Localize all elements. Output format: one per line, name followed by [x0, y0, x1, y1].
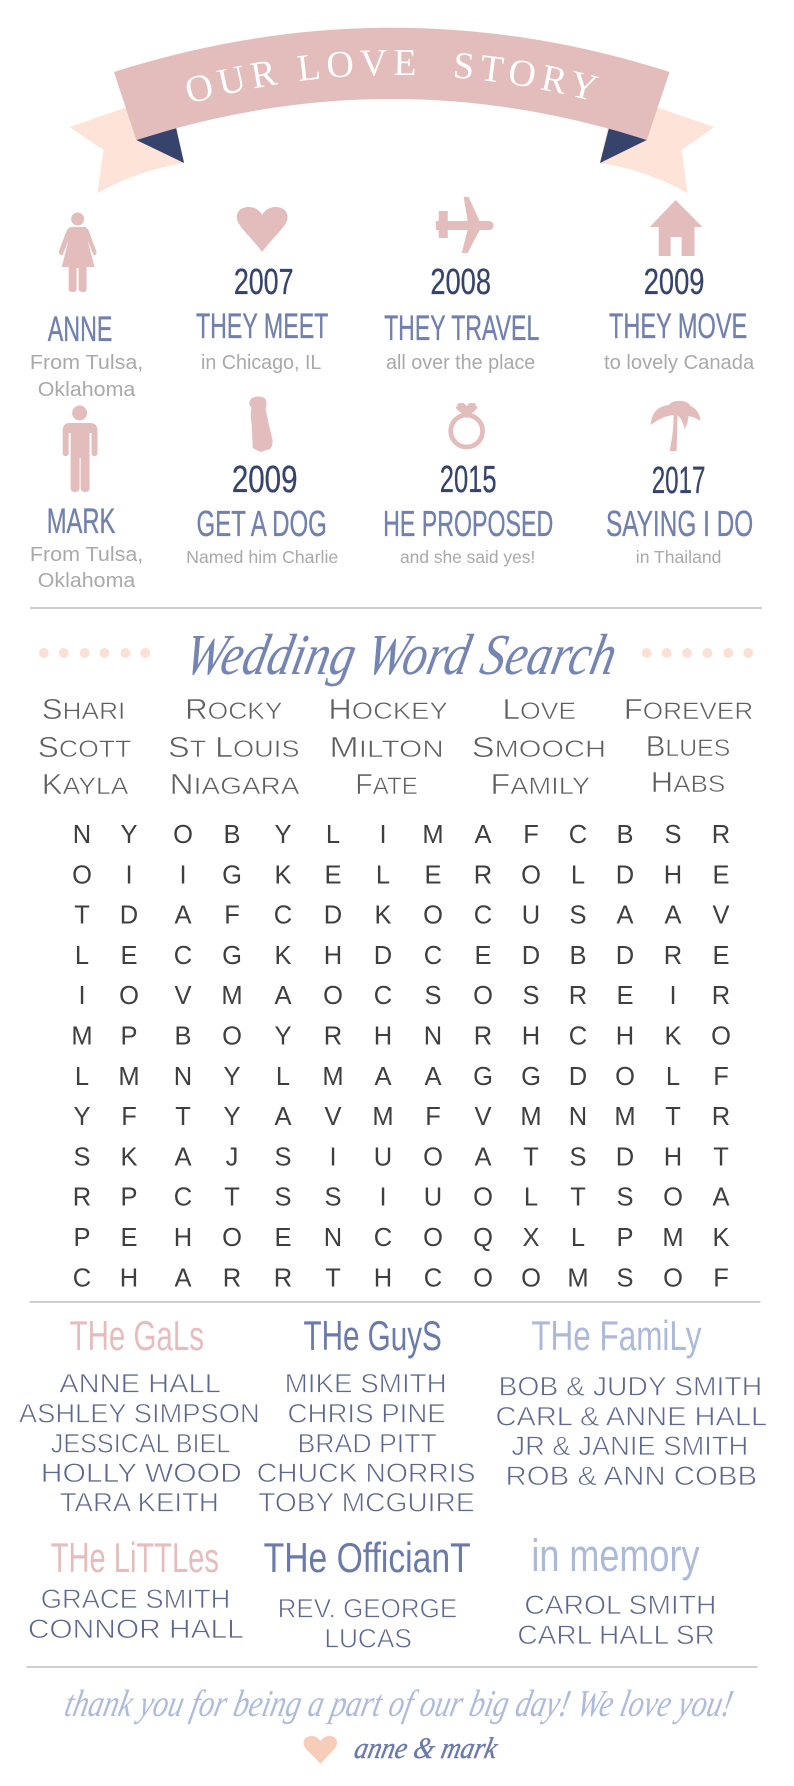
2015 he proposed: 2015 — [440, 459, 497, 501]
letter grid: RPCTSSIUOLTSOA — [73, 1184, 730, 1212]
heading: wedding word search: Wedding Word Search — [179, 623, 623, 687]
letter grid — [71, 821, 731, 1292]
icon: ring — [451, 403, 483, 447]
the officiant: LUCAS — [324, 1624, 412, 1654]
Anne block: Oklahoma — [38, 379, 136, 401]
footer — [61, 1683, 737, 1765]
2009 they move — [604, 200, 755, 374]
2015 he proposed: and she said yes! — [400, 547, 535, 567]
2007 they meet — [196, 207, 328, 374]
dots right — [642, 648, 753, 658]
Mark block: MARK — [47, 502, 115, 541]
banner tail left — [70, 108, 184, 193]
panel: word search — [38, 623, 753, 1292]
the littles: CONNOR HALL — [28, 1614, 244, 1644]
2009 they move: to lovely Canada — [604, 352, 755, 374]
letter grid: LMNYLMAAGGDOLF — [75, 1063, 729, 1091]
the family: JR & JANIE SMITH — [511, 1431, 748, 1461]
word list: MILTON — [329, 732, 444, 764]
the guys — [257, 1312, 476, 1518]
the gals: ANNE HALL — [59, 1369, 221, 1399]
the family: CARL & ANNE HALL — [496, 1401, 767, 1431]
2009 get a dog — [186, 396, 338, 567]
word list: HABS — [651, 767, 725, 799]
2007 they meet: in Chicago, IL — [201, 352, 321, 374]
2007 they meet: THEY MEET — [196, 307, 328, 346]
the littles — [28, 1534, 244, 1644]
panel: wedding party — [19, 1312, 767, 1654]
the littles: GRACE SMITH — [41, 1584, 230, 1614]
in memory: in memory — [531, 1530, 700, 1581]
2017 saying i do: 2017 — [652, 460, 705, 502]
2015 he proposed: HE PROPOSED — [383, 503, 553, 544]
letter grid: NYOBYLIMAFCBSR — [73, 821, 730, 849]
Anne block: ANNE — [48, 310, 112, 349]
2008 they travel — [384, 197, 539, 374]
in memory: CARL HALL SR — [517, 1620, 715, 1650]
timeline panel — [30, 197, 755, 592]
icon: peach heart — [304, 1736, 337, 1764]
Anne block — [30, 212, 143, 401]
word list: HOCKEY — [328, 694, 448, 726]
word list: NIAGARA — [170, 769, 300, 801]
2017 saying i do — [606, 401, 753, 567]
letter grid: LECGKHDCEDBDRE — [75, 942, 730, 970]
word list: FATE — [355, 769, 418, 801]
2017 saying i do: in Thailand — [636, 547, 721, 567]
2009 they move: 2009 — [644, 261, 704, 302]
2009 get a dog: GET A DOG — [197, 503, 327, 544]
in memory — [517, 1530, 716, 1650]
word list: ST LOUIS — [168, 732, 299, 764]
icon: plane — [436, 197, 494, 253]
the gals: TARA KEITH — [60, 1488, 219, 1518]
2009 get a dog: 2009 — [232, 459, 298, 501]
letter grid: YFTYAVMFVMNMTR — [73, 1103, 730, 1131]
letter grid: OIIGKELEROLDHE — [72, 861, 730, 889]
the family: BOB & JUDY SMITH — [498, 1371, 762, 1401]
the guys: BRAD PITT — [298, 1428, 437, 1458]
2007 they meet: 2007 — [234, 261, 294, 302]
the gals: THe GaLs — [70, 1312, 204, 1359]
the guys: CHUCK NORRIS — [257, 1458, 476, 1488]
letter grid: IOVMAOCSOSREIR — [78, 982, 730, 1010]
word list: SHARI — [42, 694, 125, 726]
2008 they travel: THEY TRAVEL — [384, 309, 539, 348]
word list: ROCKY — [185, 694, 283, 726]
icon: palm tree — [651, 401, 700, 451]
signature: anne & mark — [352, 1731, 501, 1765]
the gals: ASHLEY SIMPSON — [19, 1399, 260, 1429]
the guys: THe GuyS — [303, 1312, 442, 1359]
the family: ROB & ANN COBB — [505, 1461, 757, 1491]
Anne block: From Tulsa, — [30, 352, 143, 374]
word list: SCOTT — [38, 732, 131, 764]
dots left — [39, 648, 150, 658]
word list: LOVE — [502, 694, 576, 726]
2008 they travel: 2008 — [430, 261, 491, 302]
the guys: CHRIS PINE — [288, 1399, 446, 1429]
word list: FOREVER — [624, 694, 753, 726]
the family: THe FamiLy — [531, 1312, 702, 1359]
banner tail right — [600, 108, 714, 193]
banner: our love story — [70, 28, 714, 193]
word list: KAYLA — [42, 769, 129, 801]
the officiant — [264, 1534, 471, 1654]
word list — [38, 694, 753, 801]
icon: woman — [59, 212, 97, 292]
banner fold right — [600, 128, 647, 163]
icon: house — [650, 200, 702, 256]
the guys: TOBY MCGUIRE — [258, 1488, 475, 1518]
word list: FAMILY — [491, 769, 590, 801]
letter grid: CHARRTHCOOMSOF — [73, 1264, 729, 1292]
the gals: JESSICAL BIEL — [51, 1428, 230, 1458]
Mark block: Oklahoma — [38, 570, 136, 592]
letter grid: TDAFCDKOCUSAAV — [74, 902, 730, 930]
icon: man — [63, 406, 98, 492]
the gals: HOLLY WOOD — [41, 1458, 242, 1488]
title: OUR LOVE STORY — [186, 50, 599, 102]
2008 they travel: all over the place — [386, 352, 535, 374]
banner fold left — [136, 128, 184, 163]
2015 he proposed — [383, 403, 553, 567]
the gals — [19, 1312, 260, 1518]
letter grid: PEHOENCOQXLPMK — [73, 1224, 730, 1252]
the officiant: THe OfficianT — [264, 1534, 471, 1581]
word list: BLUES — [646, 731, 730, 763]
icon: heart — [237, 207, 288, 252]
letter grid: MPBOYRHNRHCHKO — [71, 1022, 731, 1050]
in memory: CAROL SMITH — [524, 1590, 716, 1620]
banner body — [114, 28, 670, 140]
the officiant: REV. GEORGE — [278, 1594, 457, 1624]
letter grid: SKAJSIUOATSDHT — [73, 1143, 729, 1171]
icon: dog — [249, 396, 273, 452]
2009 get a dog: Named him Charlie — [186, 547, 338, 567]
the family — [496, 1312, 767, 1491]
word list: SMOOCH — [472, 732, 606, 764]
Mark block — [30, 406, 143, 592]
Mark block: From Tulsa, — [30, 544, 143, 566]
the littles: THe LiTTLes — [51, 1534, 219, 1581]
the guys: MIKE SMITH — [285, 1369, 447, 1399]
